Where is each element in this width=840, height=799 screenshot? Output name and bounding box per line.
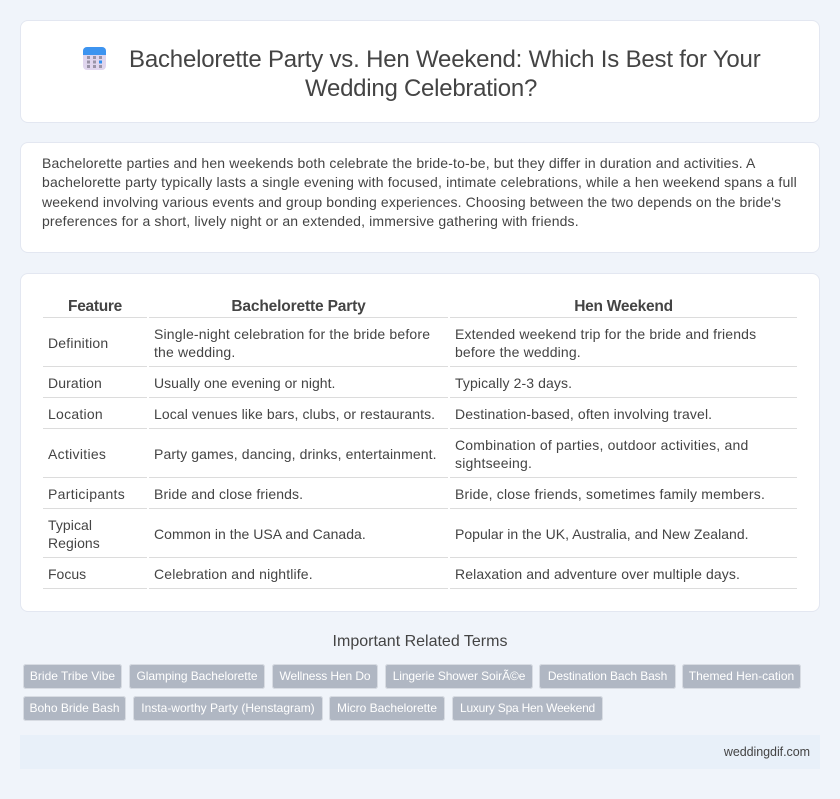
row: Participants: Bride, close friends, sometimes family members. xyxy=(455,486,765,502)
tag: Insta-worthy Party (Henstagram) xyxy=(141,701,315,715)
row: Activities: Party games, dancing, drinks, entertainment. xyxy=(154,446,437,462)
tag xyxy=(133,696,323,721)
row: Activities xyxy=(48,437,748,471)
row: Definition: Extended weekend trip for the bride and friends xyxy=(455,326,756,342)
title: Wedding Celebration? xyxy=(305,75,537,102)
row: Activities: Activities xyxy=(48,446,106,462)
tag: Wellness Hen Do xyxy=(280,669,370,683)
row: Duration xyxy=(48,375,572,391)
intro paragraph xyxy=(42,154,797,229)
row: Definition xyxy=(48,326,756,360)
table header: Bachelorette Party: Bachelorette Party xyxy=(231,298,366,315)
tag xyxy=(539,664,676,689)
row: Typical Regions xyxy=(48,517,749,551)
footer xyxy=(20,735,820,769)
row: Definition: Definition xyxy=(48,335,108,351)
row: Location xyxy=(48,406,712,422)
tag xyxy=(682,664,801,689)
tag xyxy=(23,664,122,689)
tag: Glamping Bachelorette xyxy=(136,669,258,683)
row: Definition: Single-night celebration for the bride before xyxy=(154,326,430,342)
intro paragraph: Bachelorette parties and hen weekends both celebrate the bride-to-be, but they differ in duration and activities. A xyxy=(42,154,756,170)
tag: Destination Bach Bash xyxy=(548,669,667,683)
footer source text: weddingdif.com xyxy=(724,745,810,759)
row: Activities: Combination of parties, outdoor activities, and xyxy=(455,437,748,453)
title xyxy=(129,46,761,102)
intro paragraph: preferences for a short, lively night or an extended, immersive gathering with friends. xyxy=(42,213,579,229)
row: Typical Regions: Common in the USA and Canada. xyxy=(154,526,366,542)
tag: Lingerie Shower SoirÃ©e xyxy=(393,669,525,683)
tag xyxy=(23,696,126,721)
related terms tags xyxy=(23,664,801,721)
row: Duration: Typically 2-3 days. xyxy=(455,375,572,391)
row: Participants xyxy=(48,486,765,502)
row: Definition: before the wedding. xyxy=(455,344,581,360)
table header: Feature: Feature xyxy=(68,298,122,315)
tag: Boho Bride Bash xyxy=(29,701,120,715)
tag: Micro Bachelorette xyxy=(337,701,437,715)
intro paragraph: weekend involving various events and group bonding experiences. Choosing between the two depends on the bride's xyxy=(42,194,781,210)
tag xyxy=(329,696,445,721)
icon: calendar xyxy=(83,47,106,70)
heading: Important Related Terms: Important Related Terms xyxy=(333,633,507,650)
tag: Luxury Spa Hen Weekend xyxy=(460,701,595,715)
title: Bachelorette Party vs. Hen Weekend: Which Is Best for Your xyxy=(129,46,761,73)
row: Typical Regions: Popular in the UK, Australia, and New Zealand. xyxy=(455,526,749,542)
tag xyxy=(129,664,265,689)
row: Typical Regions: Regions xyxy=(48,535,100,551)
table header: Hen Weekend: Hen Weekend xyxy=(574,298,673,315)
panel: title card xyxy=(20,20,820,123)
tag: Themed Hen-cation xyxy=(689,669,794,683)
row: Location: Destination-based, often involving travel. xyxy=(455,406,712,422)
row: Location: Local venues like bars, clubs, or restaurants. xyxy=(154,406,435,422)
intro paragraph: bachelorette party typically lasts a single evening with focused, intimate celebrations, while a hen weekend spans a full xyxy=(42,174,797,190)
row: Focus xyxy=(48,566,740,582)
row: Duration: Duration xyxy=(48,375,102,391)
row: Definition: the wedding. xyxy=(154,344,235,360)
row: Typical Regions: Typical xyxy=(48,517,92,533)
tag: Bride Tribe Vibe xyxy=(30,669,115,683)
panel: intro text xyxy=(20,142,820,253)
panel: comparison table xyxy=(20,273,820,612)
row: Activities: sightseeing. xyxy=(455,455,532,471)
row: Focus: Focus xyxy=(48,566,86,582)
row: Participants: Bride and close friends. xyxy=(154,486,303,502)
tag xyxy=(452,696,603,721)
row: Focus: Celebration and nightlife. xyxy=(154,566,313,582)
tag xyxy=(272,664,378,689)
row: Participants: Participants xyxy=(48,486,125,502)
row: Location: Location xyxy=(48,406,103,422)
row: Duration: Usually one evening or night. xyxy=(154,375,335,391)
row: Focus: Relaxation and adventure over multiple days. xyxy=(455,566,740,582)
tag xyxy=(385,664,533,689)
